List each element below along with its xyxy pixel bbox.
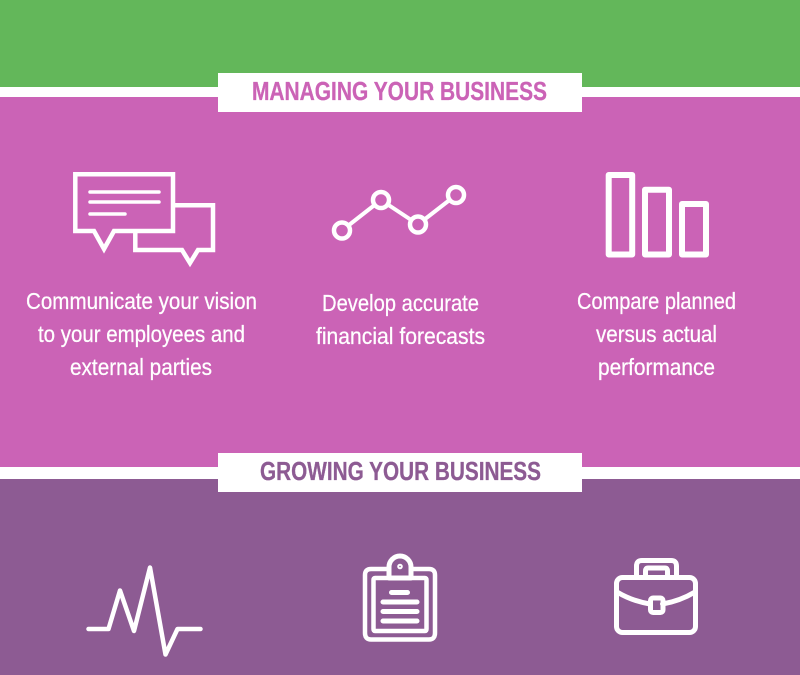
panel background: [0, 479, 800, 675]
panel background: [0, 97, 800, 467]
text: compare planned versus actual performance: versus actual: [596, 321, 717, 347]
text: develop accurate financial forecasts: financial forecasts: [316, 323, 485, 349]
top green band: [0, 0, 800, 87]
text: communicate your vision: external parties: [70, 354, 212, 380]
icon: line chart: [334, 187, 464, 238]
text: communicate your vision: Communicate your vision: [26, 288, 257, 314]
icon: bar chart: [609, 175, 706, 254]
text: communicate your vision: to your employees and: [38, 321, 245, 347]
heading: managing your business: MANAGING YOUR BUSINESS: [252, 76, 547, 106]
text: develop accurate financial forecasts: Develop accurate: [322, 290, 479, 316]
heading: growing your business: [218, 453, 582, 492]
icon: clipboard: [365, 556, 435, 640]
icon: speech bubbles: [75, 174, 213, 263]
panel: growing your business: [0, 453, 800, 675]
heading: growing your business: GROWING YOUR BUSINESS: [260, 456, 541, 486]
heading: managing your business: [218, 73, 582, 112]
panel: managing your business: [0, 73, 800, 467]
icon: briefcase: [616, 560, 696, 632]
text: compare planned versus actual performance: performance: [598, 354, 715, 380]
text: compare planned versus actual performance: Compare planned: [577, 288, 736, 314]
icon: pulse line: [88, 568, 200, 654]
